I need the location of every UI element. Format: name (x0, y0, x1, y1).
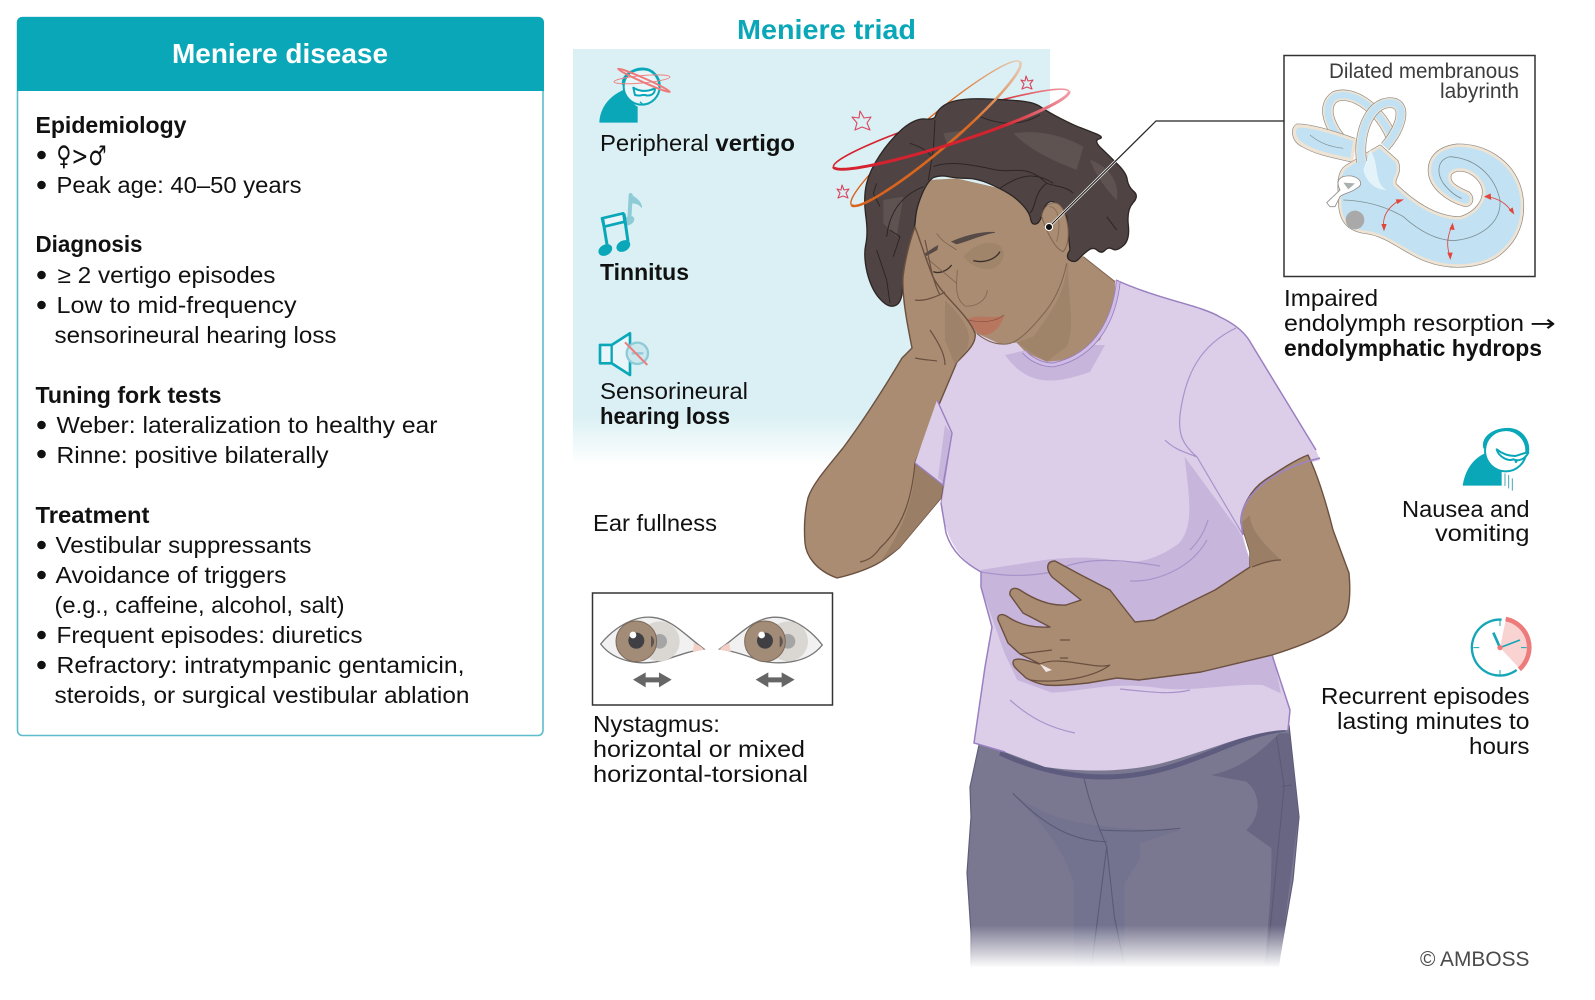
label: nystagmus (593, 711, 808, 787)
label: nystagmus: horizontal-torsional (593, 761, 808, 787)
label: endolymphatic hydrops (1284, 285, 1556, 361)
heading: Meniere triad: Meniere triad (737, 14, 916, 45)
section: diagnosis (36, 231, 336, 348)
section: epidemiology (36, 112, 302, 198)
label: endolymphatic hydrops: endolymph resorption (1284, 310, 1524, 336)
copyright: © AMBOSS (1420, 948, 1530, 971)
icon: dizzy stars (837, 76, 1033, 198)
arrow: left eye movement (633, 672, 672, 687)
collar (1024, 282, 1118, 365)
panel header: Meniere disease (172, 38, 388, 69)
icon: recurrent episodes clock (1472, 619, 1529, 676)
icon: nausea and vomiting (1463, 429, 1528, 491)
icon: tinnitus (596, 194, 642, 258)
right arm and hand (998, 455, 1350, 685)
panel: Meniere triad background (573, 49, 1050, 465)
icon: peripheral vertigo (599, 67, 671, 123)
section: treatment: steroids, or surgical vestibular ablation (54, 682, 470, 708)
label: ear fullness: Ear fullness (593, 510, 717, 536)
left sleeve (915, 400, 952, 485)
shirt (937, 280, 1320, 771)
label: sensorineural hearing loss: hearing loss (600, 403, 730, 429)
label: recurrent episodes (1321, 683, 1530, 759)
face details (924, 232, 1004, 335)
label: nystagmus: horizontal or mixed (593, 736, 805, 762)
section: epidemiology: ♀>♂ (56, 141, 106, 172)
figure: woman with vertigo and nausea (804, 61, 1350, 968)
section: tuning fork tests: Rinne: positive bilaterally (56, 442, 329, 468)
section: treatment: Refractory: intratympanic gentamicin, (56, 652, 464, 678)
label: endolymphatic hydrops: → (1530, 311, 1556, 337)
section: treatment: Treatment (36, 502, 150, 528)
panel: Meniere disease (17, 17, 544, 736)
section: treatment (36, 502, 470, 708)
section: epidemiology: Peak age: 40–50 years (56, 172, 302, 198)
label: nausea and vomiting: Nausea and (1402, 496, 1530, 522)
panel header (17, 17, 544, 91)
left arm and hand on head (804, 227, 975, 578)
arrows: membrane dilation (1384, 197, 1512, 257)
illustration: labyrinth (1292, 95, 1522, 266)
bottom fade (955, 925, 1315, 968)
head and neck (865, 99, 1136, 365)
section: treatment: Vestibular suppressants (56, 532, 312, 558)
rings: front arcs (834, 62, 1069, 206)
icon: left eye (601, 617, 704, 663)
label: sensorineural hearing loss: Sensorineural (600, 378, 748, 404)
label: recurrent episodes: hours (1469, 733, 1530, 759)
section: treatment: Frequent episodes: diuretics (56, 622, 362, 648)
label: nystagmus: Nystagmus: (593, 711, 720, 737)
icon: right eye (720, 617, 822, 663)
section: diagnosis: Diagnosis (36, 231, 142, 257)
section: treatment: Avoidance of triggers (56, 562, 286, 588)
label: peripheral vertigo: Peripheral vertigo (600, 130, 795, 156)
section: tuning fork tests (36, 382, 438, 468)
section: diagnosis: sensorineural hearing loss (54, 322, 336, 348)
label: endolymphatic hydrops: Impaired (1284, 285, 1378, 311)
label: tinnitus: Tinnitus (600, 259, 689, 285)
rings: back arcs (833, 61, 1069, 205)
label: dilated membranous labyrinth: labyrinth (1440, 80, 1519, 103)
section: treatment: (e.g., caffeine, alcohol, salt) (54, 592, 344, 618)
label: dilated membranous labyrinth (1329, 60, 1519, 103)
section: diagnosis: ≥ 2 vertigo episodes (58, 262, 276, 288)
section: tuning fork tests: Tuning fork tests (36, 382, 222, 408)
icon: hearing loss speaker (600, 333, 648, 375)
hair (865, 99, 1136, 306)
label: endolymphatic hydrops: endolymphatic hydrops (1284, 335, 1542, 361)
pants (967, 725, 1299, 967)
label: nausea and vomiting (1402, 496, 1530, 546)
section: diagnosis: Low to mid-frequency (56, 292, 297, 318)
label: nausea and vomiting: vomiting (1435, 520, 1530, 546)
label: sensorineural hearing loss (600, 378, 748, 429)
inset: nystagmus eyes (592, 593, 832, 705)
ear (1042, 203, 1068, 252)
leader line from ear to inset (1045, 121, 1284, 231)
section: tuning fork tests: Weber: lateralization to healthy ear (56, 412, 438, 438)
inset: dilated membranous labyrinth (1284, 56, 1535, 276)
label: recurrent episodes: lasting minutes to (1337, 708, 1530, 734)
label: recurrent episodes: Recurrent episodes (1321, 683, 1530, 709)
section: epidemiology: Epidemiology (36, 112, 187, 138)
arrow: right eye movement (756, 672, 795, 687)
label: dilated membranous labyrinth: Dilated membranous (1329, 60, 1519, 83)
